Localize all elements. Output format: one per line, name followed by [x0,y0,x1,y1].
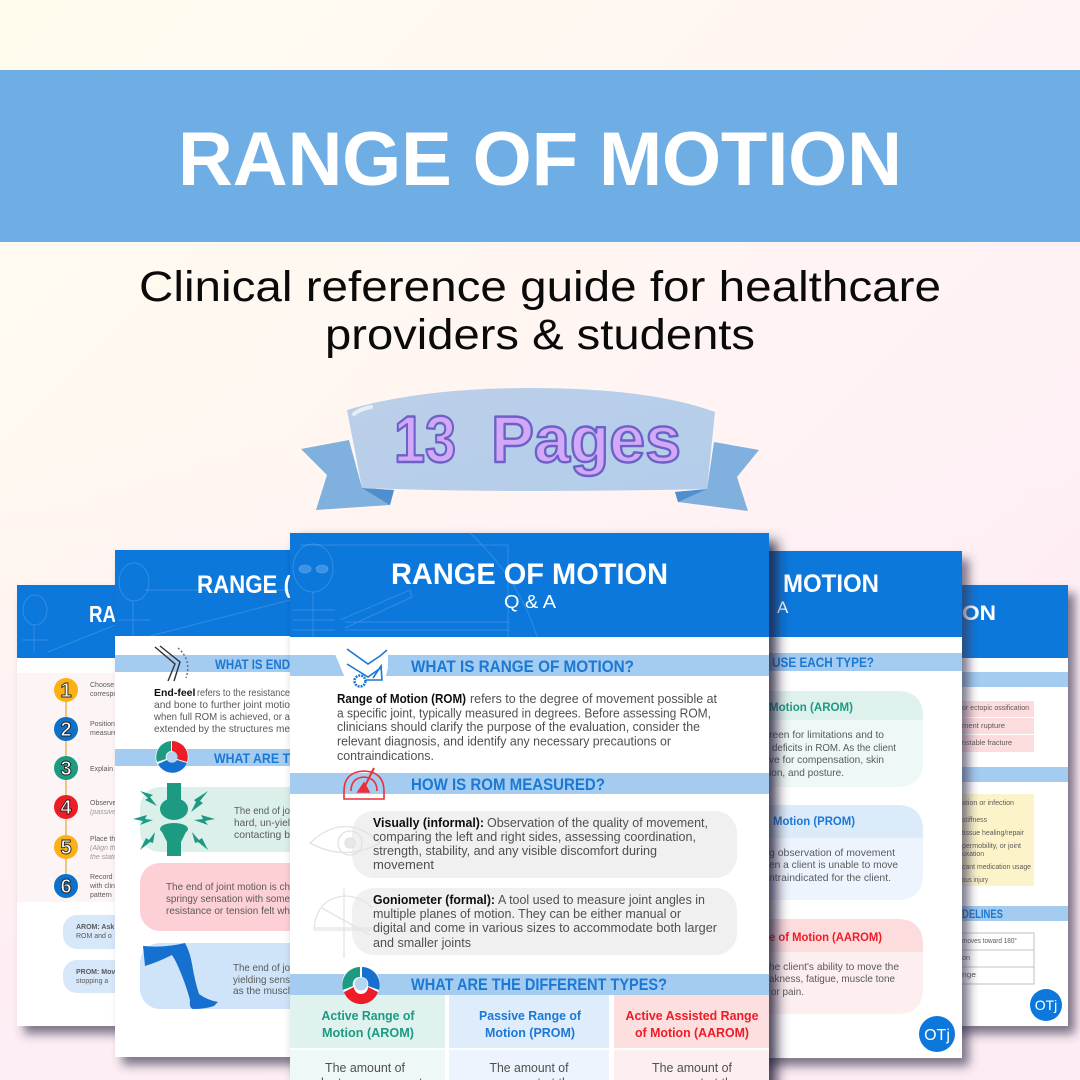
subtitle [139,263,941,359]
ROM definition: relevant diagnosis, and identify any necessary precautions or [337,734,672,748]
step text: (passive [90,809,116,816]
step text: corresponding [90,691,134,698]
contraindications table: ment rupture [962,723,1005,730]
step text: Observe [90,800,117,807]
AROM note: ROM and o [76,933,112,940]
ROM definition [337,691,717,763]
page: far right precautions [890,585,1068,1026]
PROM note: stopping a [76,978,108,985]
icon: knee bone [133,783,215,856]
card: firm end-feel [140,943,315,1009]
step text: Record [90,874,113,881]
card: visually: strength, stability, and any visible discomfort during [373,843,657,858]
PROM note [63,960,183,993]
logo: OTj [919,1016,955,1052]
logo: OTj small: OTj [1035,997,1057,1013]
guidelines table: on [962,955,970,962]
icon: arm with gear [335,649,388,690]
precautions table: uxation [962,851,984,858]
ROM definition: contraindications. [337,748,434,763]
card: PROM use [740,805,923,900]
end-feel text [153,687,290,735]
card: AAROM use: he client's ability to move the [769,961,899,973]
card: goniometer: digital and come in various sizes to accommodate both larger [373,920,718,935]
card: AROM use: Motion (AROM) [769,700,853,714]
contraindications table: nstable fracture [962,740,1012,747]
column: AAROM: The amount of [652,1060,732,1075]
step 6 [54,874,78,898]
step 2 [54,717,78,741]
icon: donut [156,740,188,774]
card: PROM use: en a client is unable to move [769,859,898,871]
precautions table: ation or infection [962,800,1014,807]
card: AAROM use [740,919,923,1014]
AROM note: AROM: Ask [76,924,114,931]
column: PROM: The amount of [490,1060,569,1075]
card: goniometer: A tool used to measure joint angles in [498,892,705,907]
subtitle: providers & students [325,311,755,359]
icon: donut main [342,965,380,1004]
ROM definition: a specific joint, typically measured in degrees. Before assessing ROM, [337,706,711,720]
end-feel text: End-feel [154,687,196,699]
section band: what is ROM [290,655,769,676]
end-feel text: and bone to further joint motio [154,699,290,711]
step 5 [54,835,78,859]
ribbon: 13 pages: 13 [394,402,456,476]
step 4 [54,795,78,819]
card: goniometer: multiple planes of motion. They can be either manual or [373,906,682,921]
ROM definition: clinicians should clarify the purpose of the evaluation, consider the [337,719,700,734]
skeleton art [118,563,290,636]
column: AROM: The amount of [325,1060,405,1075]
page: end-feel: RANGE ( [197,571,292,599]
ROM definition: Range of Motion (ROM) [337,691,466,706]
card: AROM use: ion, and posture. [769,767,844,779]
skeleton art [22,595,115,652]
card: goniometer: and smaller joints [373,935,471,950]
icon: knee joint [155,646,188,681]
card: AROM use: deficits in ROM. As the client [772,742,896,754]
ribbon: 13 pages [301,388,759,511]
step text: Choose [90,682,114,689]
guidelines table: moves toward 180° [962,937,1017,945]
step 3 [54,756,78,780]
page: when to use each type: MOTION [783,570,879,598]
contraindications table [940,701,1034,752]
page: far left steps: RA [89,601,116,627]
column: AROM: Active Range of [322,1008,415,1023]
title banner: RANGE OF MOTION [178,117,902,202]
card: goniometer: Goniometer (formal): [373,892,495,907]
card: visually [310,811,737,878]
card: AAROM use: or pain. [771,986,804,998]
page header: Q & A [504,592,556,612]
step text: Explain [90,766,113,773]
ROM definition: refers to the degree of movement possible at [470,691,717,706]
skeleton art [293,533,537,637]
page: when to use each type: A [777,598,789,617]
step text: Position [90,721,115,728]
step text: measure [90,730,117,737]
end-feel text: extended by the structures me [154,723,290,735]
step 1 [54,678,78,702]
step 3: 3 [60,758,72,780]
ribbon: 13 pages: Pages [491,402,681,476]
step text: (Align the [90,845,120,852]
page: main Q and A [290,533,769,1080]
card: soft end-feel [140,863,315,931]
card: PROM use: Motion (PROM) [773,814,855,828]
guidelines heading: DELINES [962,907,1003,921]
heading: what is ROM: WHAT IS RANGE OF MOTION? [411,657,634,676]
contraindications table: or ectopic ossification [962,705,1029,712]
end-feel text: refers to the resistance [197,687,290,699]
step text: Place the [90,836,119,843]
precautions table: tissue healing/repair [962,830,1025,837]
precautions table: ous injury [962,877,988,884]
step text: pattern [90,892,112,899]
step text: the stationary [90,854,133,861]
heading: what is end-feel: WHAT IS END [215,656,290,672]
card: soft end-feel: The end of joint motion is ch [166,881,290,893]
step 5: 5 [60,837,72,859]
page: far right precautions: ON [962,602,996,625]
guidelines table [940,933,1034,984]
column: PROM: Passive Range of [479,1008,582,1023]
section band: how measured [290,773,769,794]
step 6: 6 [60,876,72,898]
column: AAROM: Active Assisted Range [626,1008,758,1023]
precautions table [940,794,1034,886]
step text: with clinical [89,883,126,890]
heading: types: WHAT ARE THE DIFFERENT TYPES? [411,975,667,994]
precautions table: cant medication usage [962,864,1031,871]
card: hard end-feel: hard, un-yiel [234,817,290,829]
card: goniometer [314,888,737,958]
PROM note: PROM: Move [76,969,119,976]
step text [89,682,134,899]
card: hard end-feel: contacting b [234,829,290,841]
card: firm end-feel: The end of jo [233,962,290,974]
card: firm end-feel: yielding sens [233,974,290,986]
end-feel text: when full ROM is achieved, or a [153,711,290,723]
icon: leg [143,943,218,1009]
page: end-feel [115,550,315,1057]
card: AROM use [740,691,923,787]
heading: use each type: USE EACH TYPE? [772,654,874,670]
card: hard end-feel [133,783,315,856]
card: AAROM use: e of Motion (AAROM) [769,930,882,944]
column: AAROM [614,995,769,1080]
title banner [0,70,1080,242]
card: AAROM use: akness, fatigue, muscle tone [769,973,895,985]
guidelines table: nge [962,972,976,979]
logo: OTj small [1030,989,1062,1021]
card: hard end-feel: The end of jo [234,805,290,817]
AROM note [63,915,183,949]
icon: eye [310,826,380,855]
card: soft end-feel: resistance or tension felt wh [166,905,290,917]
card: visually: Observation of the quality of movement, [487,815,708,830]
step 4: 4 [60,797,72,819]
heading: what are the types: WHAT ARE T [214,750,290,766]
card: AROM use: ve for compensation, skin [769,754,884,766]
precautions table: permobility, or joint [962,843,1021,850]
card: AROM use: reen for limitations and to [769,729,884,741]
subtitle: Clinical reference guide for healthcare [139,263,941,311]
card: PROM use: ntraindicated for the client. [769,872,891,884]
card: visually: Visually (informal): [373,815,484,830]
column: PROM: Motion (PROM) [485,1025,575,1040]
logo: OTj: OTj [924,1027,950,1044]
card: visually: comparing the left and right sides, assessing coordination, [373,829,696,844]
card: PROM use: g observation of movement [769,847,895,859]
column: AAROM: of Motion (AAROM) [635,1025,749,1040]
page: far left steps [17,585,217,1026]
card: visually: movement [373,857,434,872]
page: when to use each type [740,551,962,1058]
page header [290,533,769,637]
column: AROM [290,995,445,1080]
card: firm end-feel: as the muscl [233,985,290,997]
card: soft end-feel: springy sensation with some [166,893,290,905]
column: AROM: Motion (AROM) [322,1025,414,1040]
icon: protractor [344,768,384,799]
section band: types [290,974,769,995]
heading: how measured: HOW IS ROM MEASURED? [411,775,605,794]
step 1: 1 [60,680,72,702]
step 2: 2 [60,719,72,741]
icon: goniometer [314,888,372,958]
column: PROM [449,995,609,1080]
precautions table: stiffness [962,817,987,824]
page header: RANGE OF MOTION [391,558,668,591]
